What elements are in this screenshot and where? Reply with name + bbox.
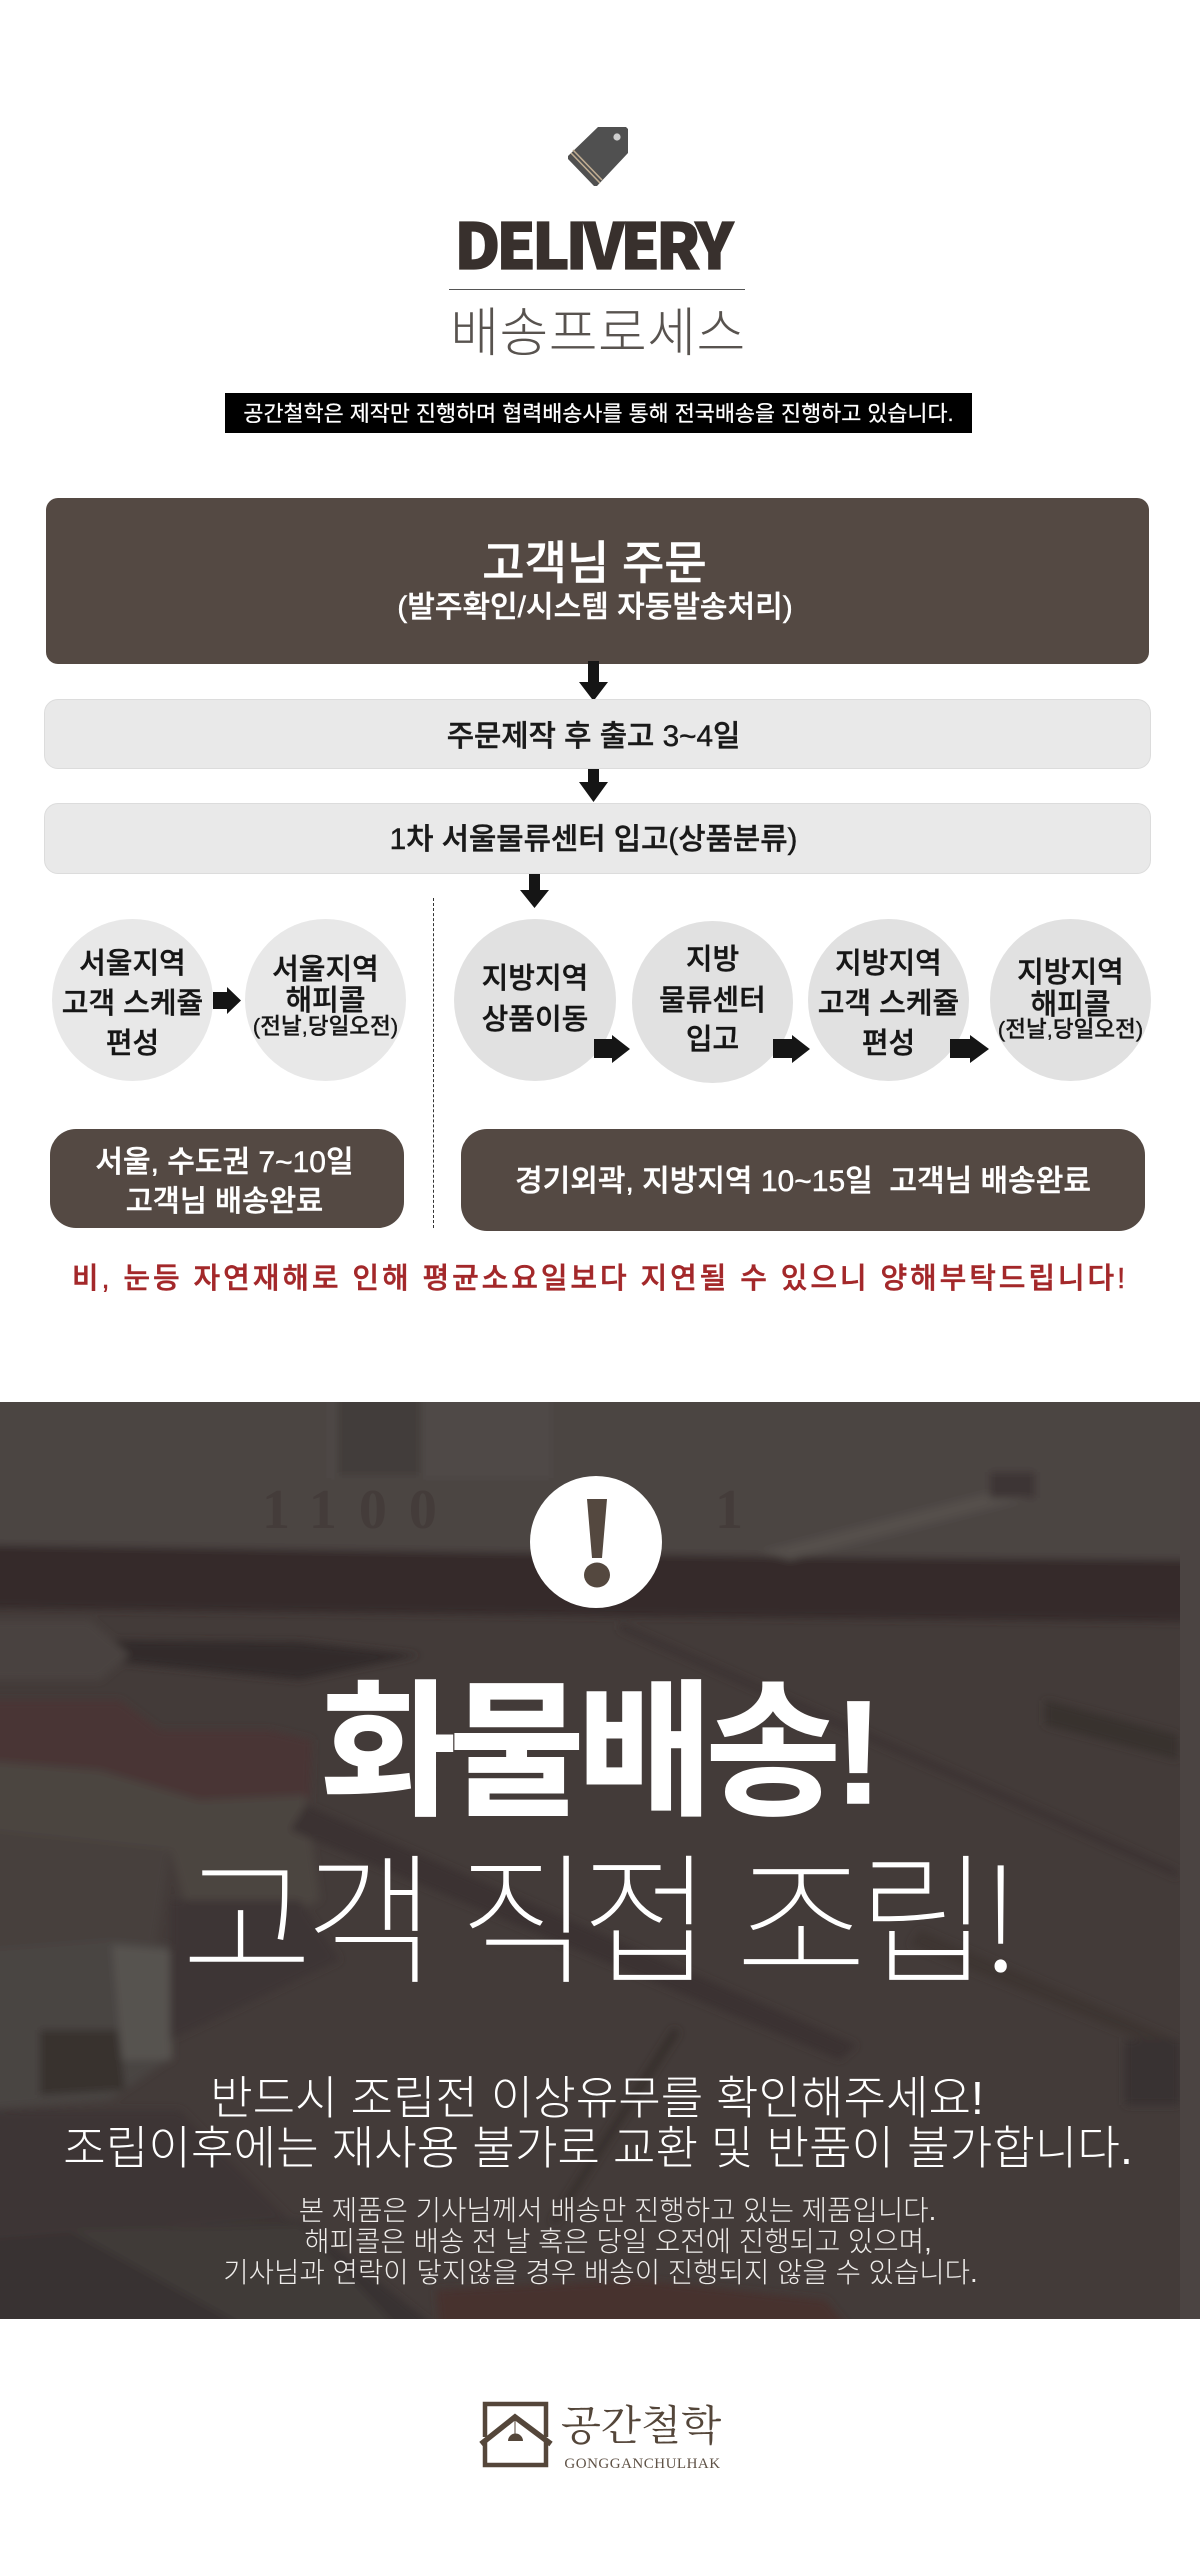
- regional transfer text: 지방지역: [482, 963, 588, 995]
- photo background: [0, 1402, 1200, 2319]
- logo: romanised name: GONGGANCHULHAK: [564, 2456, 721, 2472]
- circle: seoul schedule: [52, 919, 213, 1081]
- circle: regional transfer: [454, 919, 616, 1081]
- icon: price tag: [568, 127, 628, 186]
- circle: regional centre: [632, 921, 793, 1083]
- circle: regional schedule: 고객 스케쥴: [818, 988, 959, 1020]
- circle: seoul happy call: (전날,당일오전): [253, 1014, 398, 1039]
- step: seoul logistics centre: [44, 803, 1151, 874]
- subtitle: delivery process: 배송프로세스: [450, 304, 746, 363]
- delivery note text line 2: 해피콜은 배송 전 날 혹은 당일 오전에 진행되고 있으며,: [304, 2226, 932, 2257]
- step: production and shipping: [44, 699, 1151, 769]
- decorative digits on plank: 1: [715, 1479, 765, 1541]
- circle: regional centre: 물류센터: [659, 985, 766, 1017]
- dashed divider: [433, 898, 434, 1228]
- circle: regional centre: 입고: [686, 1024, 739, 1056]
- regional happy call text: 지방지역: [1017, 957, 1124, 989]
- decorative digits on plank: 1100: [262, 1479, 459, 1541]
- regional schedule text: 지방지역: [835, 948, 942, 980]
- icon: exclamation circle: [530, 1476, 662, 1608]
- notice banner text: 공간철학은 제작만 진행하며 협력배송사를 통해 전국배송을 진행하고 있습니다.: [243, 401, 954, 426]
- circle: regional happy call: [990, 919, 1151, 1081]
- step: customer order: [46, 498, 1149, 664]
- order heading: 고객님 주문: [482, 537, 707, 589]
- panel: assembly notice: [0, 1402, 1200, 2319]
- arrow: right 1: [213, 987, 241, 1014]
- circle: seoul happy call: 해피콜: [285, 985, 366, 1017]
- seoul result text: 서울, 수도권 7~10일: [95, 1146, 354, 1179]
- logistics text: 1차 서울물류센터 입고(상품분류): [390, 823, 797, 856]
- divider line under title: [449, 289, 745, 290]
- seoul happy call text: 서울지역: [272, 954, 379, 986]
- circle: regional schedule: 편성: [862, 1028, 915, 1060]
- circle: seoul schedule: 고객 스케쥴: [62, 988, 203, 1020]
- decorative digits on plank: [262, 1479, 765, 1541]
- delivery note text line 3: 기사님과 연락이 닿지않을 경우 배송이 진행되지 않을 수 있습니다.: [223, 2257, 978, 2288]
- logo: wordmark: 공간철학: [561, 2403, 721, 2449]
- regional centre text: 지방: [686, 944, 739, 976]
- regional result text: 경기외곽, 지방지역 10~15일 고객님 배송완료: [515, 1165, 1091, 1198]
- assembly warning text: 반드시 조립전 이상유무를 확인해주세요!: [210, 2072, 984, 2124]
- arrow: down 3: [520, 874, 549, 908]
- notice banner: [225, 393, 972, 433]
- arrow: right 4: [950, 1035, 989, 1063]
- circle: seoul schedule: 편성: [106, 1028, 159, 1060]
- arrow: down 1: [579, 661, 608, 699]
- result: seoul delivery complete: [50, 1129, 404, 1228]
- circle: regional happy call: 해피콜: [1030, 989, 1111, 1021]
- title: DELIVERY: DELIVERY: [454, 197, 730, 288]
- circle: regional schedule: [808, 919, 969, 1081]
- circle: regional happy call: (전날,당일오전): [998, 1017, 1143, 1042]
- seoul result text line 2: 고객님 배송완료: [126, 1185, 323, 1218]
- arrow: down 2: [579, 769, 608, 802]
- arrow: right 3: [773, 1035, 810, 1063]
- logo: house icon: [479, 2402, 553, 2468]
- circle: regional transfer: 상품이동: [482, 1004, 588, 1036]
- circle: seoul happy call: [245, 919, 406, 1081]
- headline: customer assembly: 고객 직접 조립!: [182, 1807, 1012, 2013]
- seoul schedule text: 서울지역: [79, 948, 186, 980]
- delivery note text: 본 제품은 기사님께서 배송만 진행하고 있는 제품입니다.: [299, 2195, 936, 2226]
- headline: freight delivery: 화물배송!: [321, 1671, 876, 1835]
- arrow: right 2: [594, 1035, 630, 1063]
- delay warning: 비, 눈등 자연재해로 인해 평균소요일보다 지연될 수 있으니 양해부탁드립니다!: [72, 1263, 1128, 1295]
- result: regional delivery complete: [461, 1129, 1145, 1231]
- assembly warning text line 2: 조립이후에는 재사용 불가로 교환 및 반품이 불가합니다.: [63, 2122, 1133, 2174]
- order subheading: (발주확인/시스템 자동발송처리): [397, 591, 793, 624]
- production text: 주문제작 후 출고 3~4일: [447, 720, 740, 753]
